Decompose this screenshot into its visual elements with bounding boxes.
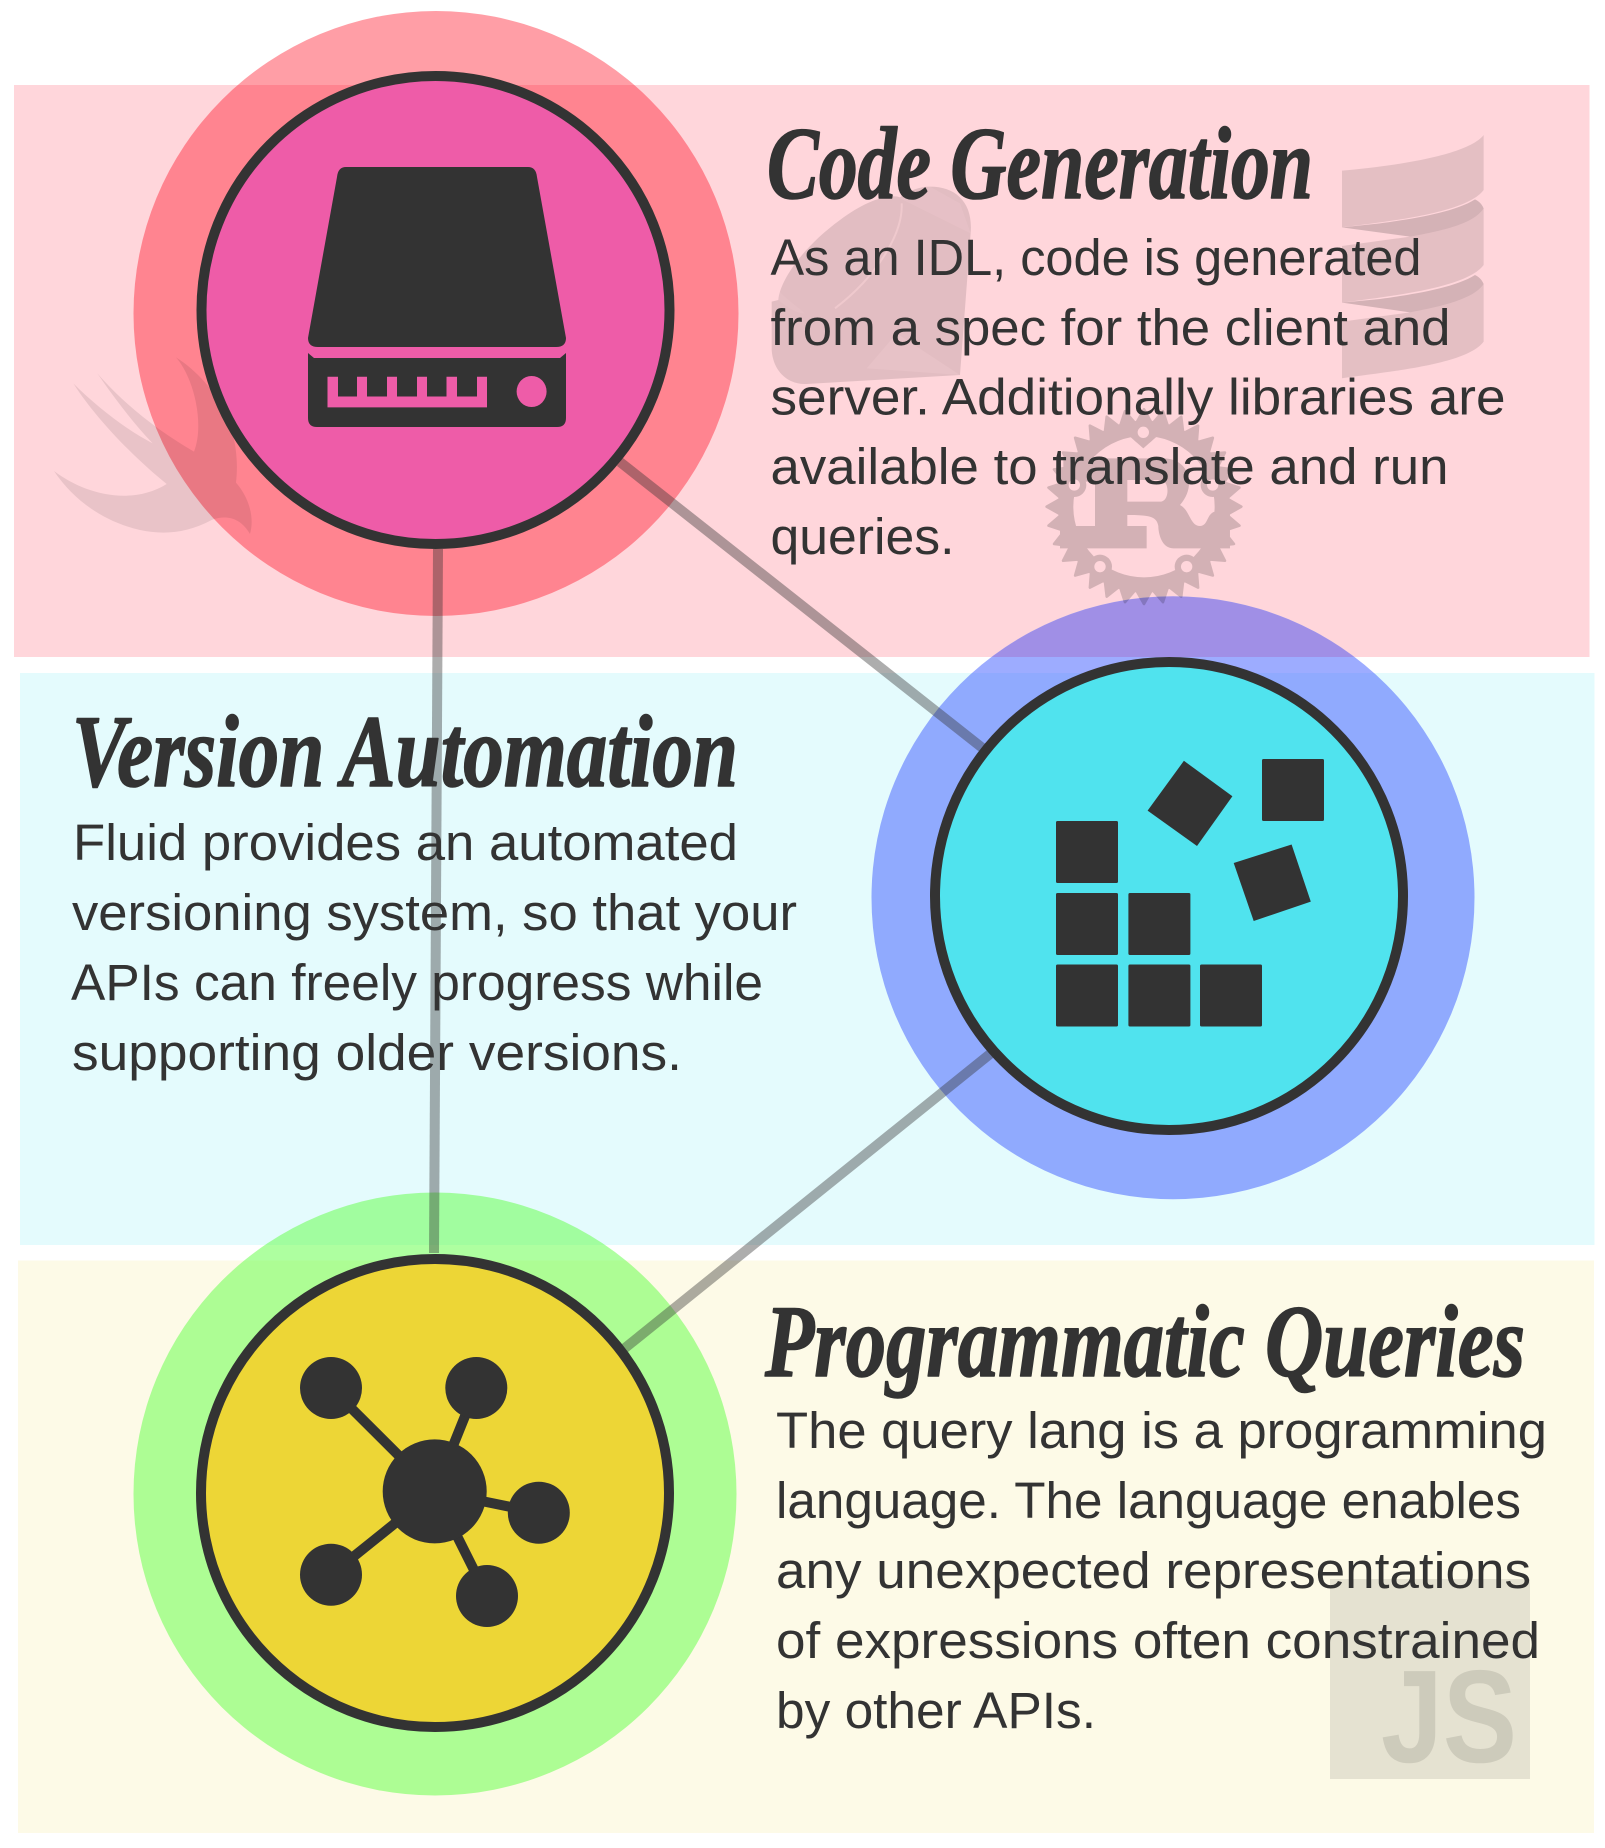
icon: network graph	[300, 1357, 570, 1627]
connector: code generation to version circle	[620, 462, 985, 750]
text block: programmatic queries description: any unexpected representations	[776, 1542, 1531, 1599]
text block: code generation description: from a spec for the client and	[770, 299, 1450, 356]
text block: version automation description: supporting older versions.	[72, 1024, 682, 1081]
text block: version automation description	[71, 814, 797, 1081]
node: code generation circle with drive icon	[202, 76, 670, 544]
node: version circle with blocks icon	[935, 662, 1403, 1130]
watermark icon: swift bird	[54, 357, 252, 534]
text block: programmatic queries description: of expressions often constrained	[776, 1612, 1540, 1669]
outer circle: blue halo	[872, 596, 1474, 1199]
connector: version to query circle	[620, 1050, 995, 1352]
node: query circle with network icon	[201, 1259, 669, 1727]
outer circle: red halo	[134, 11, 738, 616]
watermark icon: scala stack	[1342, 135, 1484, 378]
text block: version automation description: versioning system, so that your	[72, 884, 797, 941]
watermark icon: javascript logo	[1330, 1579, 1530, 1790]
text block: version automation description: APIs can freely progress while	[71, 954, 763, 1011]
text block: code generation description: queries.	[770, 508, 954, 565]
panel: programmatic queries background	[18, 1260, 1594, 1833]
watermark icon: javascript logo: JS	[1381, 1643, 1517, 1790]
text block: programmatic queries description: The query lang is a programming	[776, 1402, 1547, 1459]
heading: version automation: Version Automation	[72, 695, 738, 809]
text block: code generation description	[770, 229, 1506, 565]
panel: code generation background	[14, 85, 1590, 657]
text block: code generation description: server. Additionally libraries are	[770, 368, 1506, 426]
watermark icon: ruby gem	[772, 187, 971, 384]
watermark icon: rust gear	[1045, 408, 1243, 606]
text block: programmatic queries description	[776, 1402, 1547, 1739]
text block: programmatic queries description: language. The language enables	[776, 1472, 1521, 1529]
icon: hard drive	[308, 167, 566, 427]
text block: programmatic queries description: by other APIs.	[776, 1682, 1096, 1739]
connector: code generation to query circle	[434, 549, 438, 1253]
text block: code generation description: As an IDL, code is generated	[770, 229, 1422, 286]
icon: stacked blocks	[1056, 759, 1324, 1026]
text block: version automation description: Fluid provides an automated	[73, 814, 738, 871]
panel: version automation background	[20, 673, 1594, 1245]
text block: code generation description: available to translate and run	[770, 438, 1448, 495]
heading: code generation: Code Generation	[767, 107, 1313, 221]
outer circle: green halo	[134, 1192, 736, 1796]
